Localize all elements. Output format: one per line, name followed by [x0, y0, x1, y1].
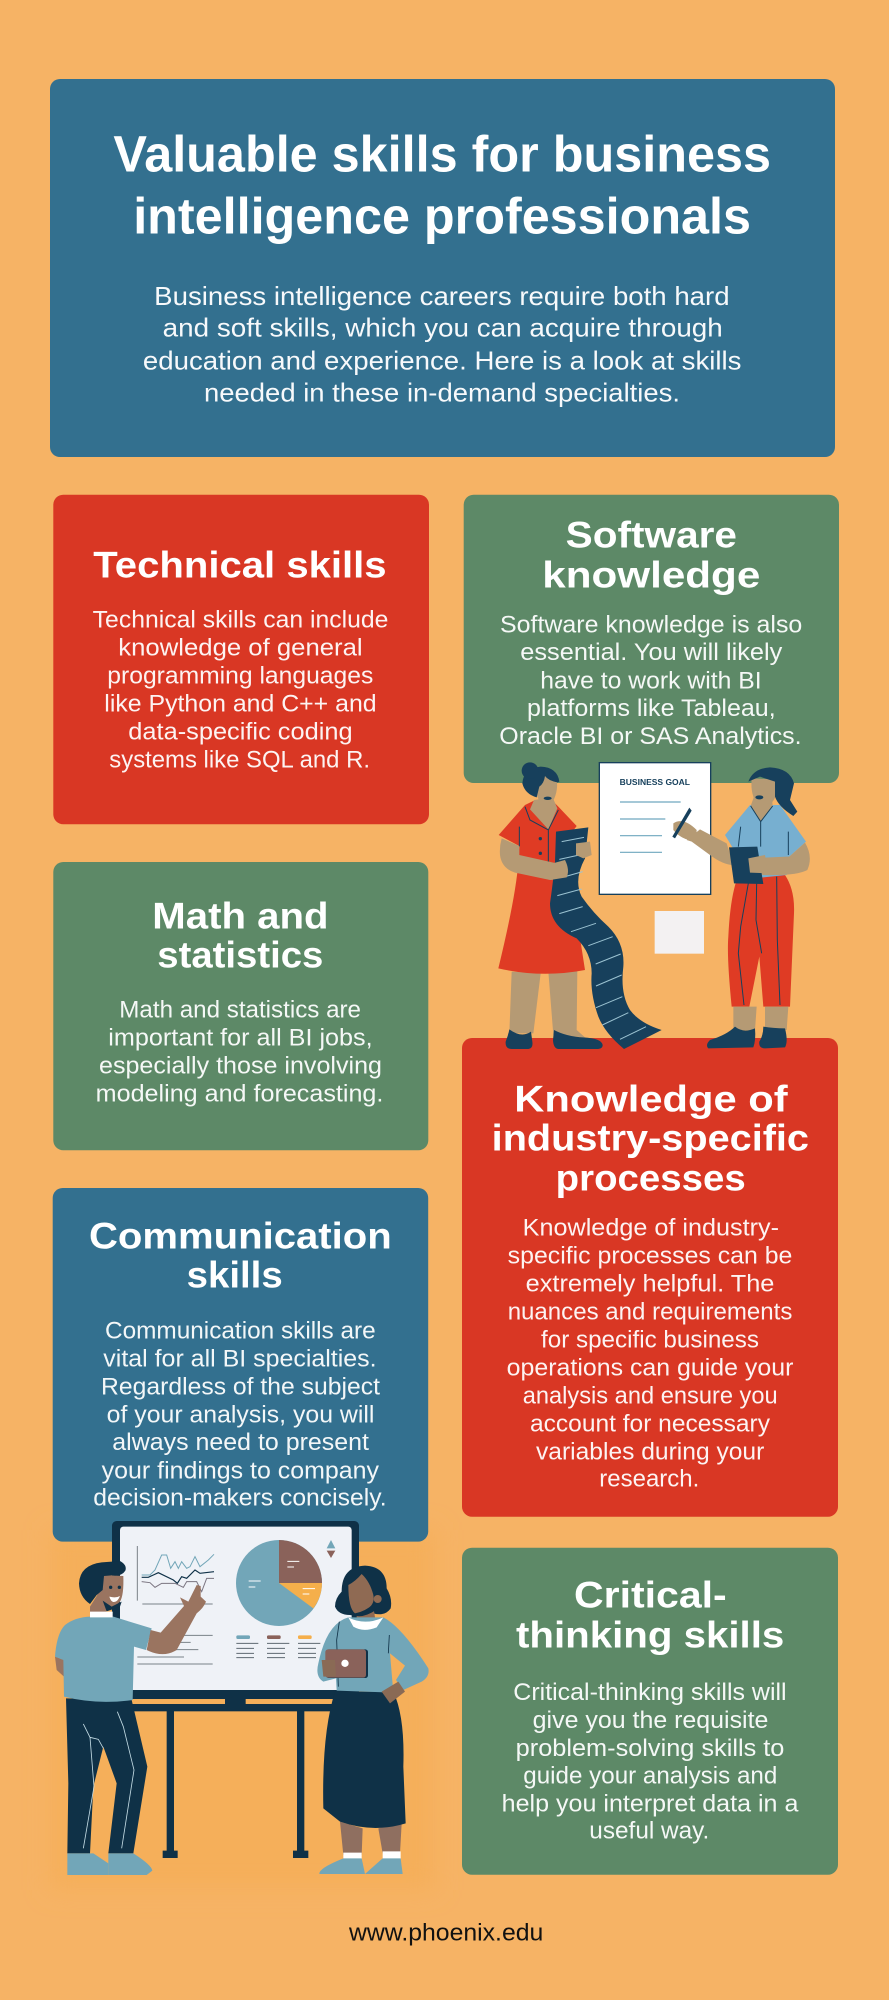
illustration: two women with business goal board [498, 762, 810, 1049]
heading: software knowledge: knowledge [542, 555, 760, 596]
intro text [143, 281, 741, 408]
panel: communication skills [53, 1188, 428, 1542]
heading: math and statistics: Math and [152, 896, 329, 937]
dashboard screen [112, 1521, 359, 1858]
pie chart [236, 1540, 322, 1626]
text: math and statistics [96, 997, 383, 1108]
text: communication skills: of your analysis, you will [107, 1402, 374, 1429]
panel: technical skills [53, 495, 429, 824]
footer: website: www.phoenix.edu [348, 1920, 543, 1947]
panel: software knowledge [464, 495, 839, 783]
chart legend [236, 1635, 320, 1658]
heading: knowledge of industry-specific processes: processes [556, 1157, 746, 1198]
heading: knowledge of industry-specific processes [492, 1078, 809, 1198]
heading: critical-thinking skills: Critical- [574, 1575, 727, 1616]
text: knowledge of industry-specific processes: analysis and ensure you [523, 1383, 778, 1410]
panel: critical-thinking skills [462, 1548, 838, 1875]
sticky note [655, 911, 704, 954]
text lines [137, 1635, 213, 1664]
heading: communication skills: skills [187, 1254, 283, 1295]
text: critical-thinking skills: help you interpret data in a [502, 1790, 799, 1817]
figure: woman writing on board [672, 767, 810, 1048]
heading: knowledge of industry-specific processes: industry-specific [492, 1118, 809, 1159]
heading: critical-thinking skills [516, 1575, 784, 1655]
text: communication skills: vital for all BI specialties. [103, 1346, 377, 1373]
text: technical skills: knowledge of general [118, 635, 363, 662]
text: math and statistics: Math and statistics are [119, 997, 361, 1024]
title: Valuable skills for business [113, 126, 771, 183]
text: knowledge of industry-specific processes: variables during your [536, 1439, 764, 1466]
text: software knowledge [499, 612, 802, 750]
heading: math and statistics: statistics [157, 935, 323, 976]
text: communication skills: your findings to company [102, 1457, 380, 1484]
heading: software knowledge: Software [566, 515, 737, 556]
text: knowledge of industry-specific processes: Knowledge of industry- [523, 1215, 779, 1242]
figure: man pointing at the chart [55, 1561, 206, 1875]
text: knowledge of industry-specific processes: operations can guide your [507, 1355, 793, 1382]
text: critical-thinking skills: problem-solving skills to [516, 1735, 784, 1762]
text: knowledge of industry-specific processes: extremely helpful. The [526, 1271, 774, 1298]
text: knowledge of industry-specific processes [507, 1215, 793, 1493]
heading: math and statistics [152, 896, 329, 976]
text: critical-thinking skills: guide your analysis and [523, 1762, 777, 1789]
text: technical skills: Technical skills can include [93, 607, 388, 634]
text: technical skills: programming languages [107, 663, 373, 690]
text: critical-thinking skills: Critical-thinking skills will [513, 1679, 787, 1706]
text: software knowledge: essential. You will likely [520, 639, 783, 666]
heading: knowledge of industry-specific processes: Knowledge of [514, 1078, 788, 1119]
heading: software knowledge [542, 515, 760, 596]
illustration: two people presenting at a dashboard screen [55, 1521, 429, 1875]
board: business goal: BUSINESS GOAL [620, 777, 690, 787]
title: intelligence professionals [133, 187, 751, 244]
text: technical skills: data-specific coding [128, 719, 353, 746]
figure: woman with tablet [317, 1566, 429, 1874]
heading: communication skills [89, 1215, 392, 1295]
intro text: needed in these in-demand specialties. [204, 378, 680, 408]
board: business goal [599, 763, 711, 894]
text: knowledge of industry-specific processes: specific processes can be [508, 1243, 792, 1270]
text: technical skills: like Python and C++ and [104, 691, 377, 718]
intro text: Business intelligence careers require both hard [154, 281, 730, 311]
text: communication skills [93, 1318, 387, 1512]
text: communication skills: always need to present [112, 1429, 369, 1456]
sort arrows [327, 1540, 335, 1558]
title [113, 126, 771, 244]
text: knowledge of industry-specific processes: nuances and requirements [508, 1299, 792, 1326]
text: technical skills: systems like SQL and R. [109, 747, 370, 774]
text: knowledge of industry-specific processes: for specific business [541, 1327, 759, 1354]
heading: communication skills: Communication [89, 1215, 392, 1256]
text: communication skills: Communication skills are [105, 1318, 376, 1345]
figure: woman with paper scroll [498, 762, 662, 1049]
text: math and statistics: especially those involving [99, 1053, 382, 1080]
intro text: and soft skills, which you can acquire through [163, 313, 723, 343]
text: software knowledge: have to work with BI [540, 667, 762, 694]
panel: math and statistics [53, 862, 428, 1150]
text: critical-thinking skills: useful way. [589, 1818, 709, 1845]
text: knowledge of industry-specific processes: account for necessary [530, 1411, 771, 1438]
text: software knowledge: Oracle BI or SAS Analytics. [499, 723, 802, 750]
text: math and statistics: important for all BI jobs, [108, 1025, 373, 1052]
panel: header [50, 79, 835, 457]
text: software knowledge: Software knowledge is also [500, 612, 802, 639]
text: communication skills: Regardless of the subject [101, 1374, 380, 1401]
text: software knowledge: platforms like Tableau, [527, 695, 776, 722]
line chart [137, 1546, 214, 1604]
panel: knowledge of industry-specific processes [462, 1038, 838, 1517]
text: critical-thinking skills [502, 1679, 799, 1845]
text: critical-thinking skills: give you the requisite [533, 1707, 768, 1734]
text: math and statistics: modeling and forecasting. [96, 1081, 383, 1108]
heading: critical-thinking skills: thinking skills [516, 1614, 784, 1655]
text: communication skills: decision-makers concisely. [93, 1485, 387, 1512]
intro text: education and experience. Here is a look at skills [143, 345, 741, 375]
text: knowledge of industry-specific processes: research. [599, 1466, 699, 1493]
heading: technical skills: Technical skills [93, 544, 387, 586]
text: technical skills [93, 607, 388, 774]
